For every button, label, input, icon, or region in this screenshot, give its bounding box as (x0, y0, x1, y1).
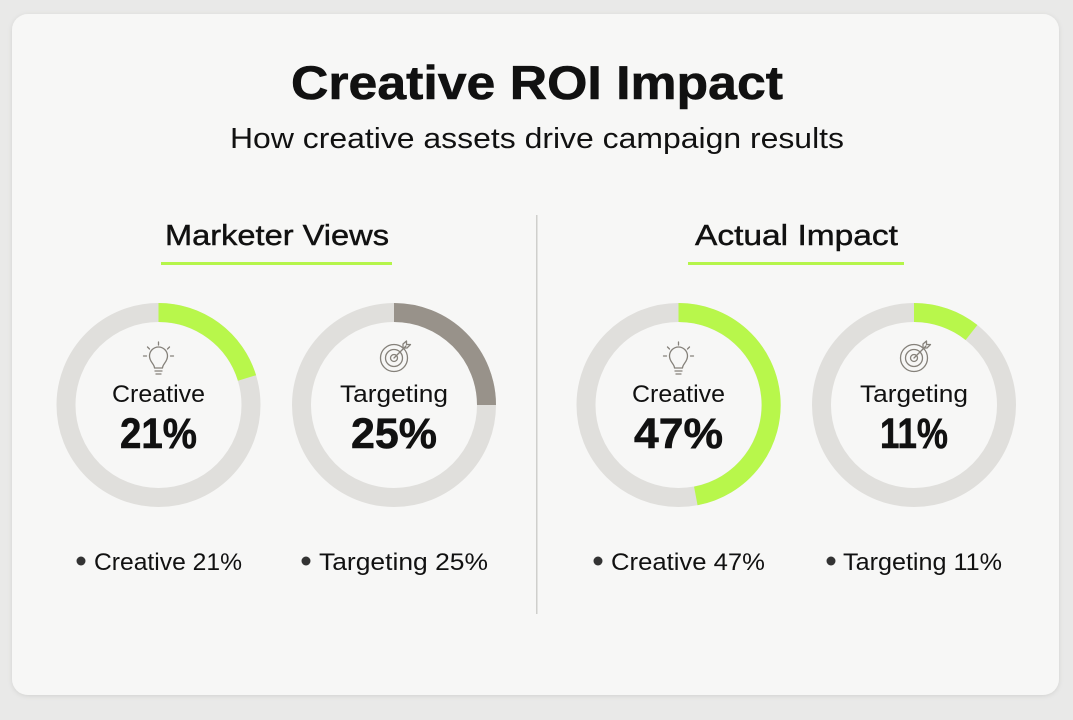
donut: creative 47%: Creative (632, 381, 725, 408)
center divider (536, 215, 538, 614)
donut: targeting 25% (302, 312, 486, 498)
donut: creative 21% (66, 312, 251, 498)
heading: actual impact: Actual Impact (695, 220, 898, 252)
legend: targeting 11%: Targeting 11% (843, 549, 1002, 576)
donut: targeting 11% (822, 312, 1006, 498)
donut: targeting 25%: 25% (351, 410, 437, 458)
donut: creative 21%: Creative (112, 381, 205, 408)
donut: targeting 11%: Targeting (860, 381, 968, 408)
icon: target (900, 341, 930, 372)
title: Creative ROI Impact (291, 56, 783, 109)
legend: creative 47%: Creative 47% (611, 549, 765, 576)
subtitle: How creative assets drive campaign results (230, 123, 844, 155)
heading underline (161, 262, 392, 265)
icon: target (380, 341, 410, 372)
donut: creative 47%: 47% (634, 410, 723, 458)
icon: light bulb (144, 342, 174, 374)
donut: targeting 25%: Targeting (340, 381, 448, 408)
icon: light bulb (664, 342, 694, 374)
panel: marketer views (66, 220, 488, 576)
donut: creative 21%: 21% (120, 410, 197, 458)
legend: targeting 25%: Targeting 25% (319, 549, 488, 576)
heading underline (688, 262, 904, 265)
panel: actual impact (586, 220, 1006, 576)
donut: targeting 11%: 11% (880, 410, 948, 458)
legend: creative 21%: Creative 21% (94, 549, 242, 576)
donut: creative 47% (586, 312, 771, 498)
heading: marketer views: Marketer Views (165, 220, 389, 252)
